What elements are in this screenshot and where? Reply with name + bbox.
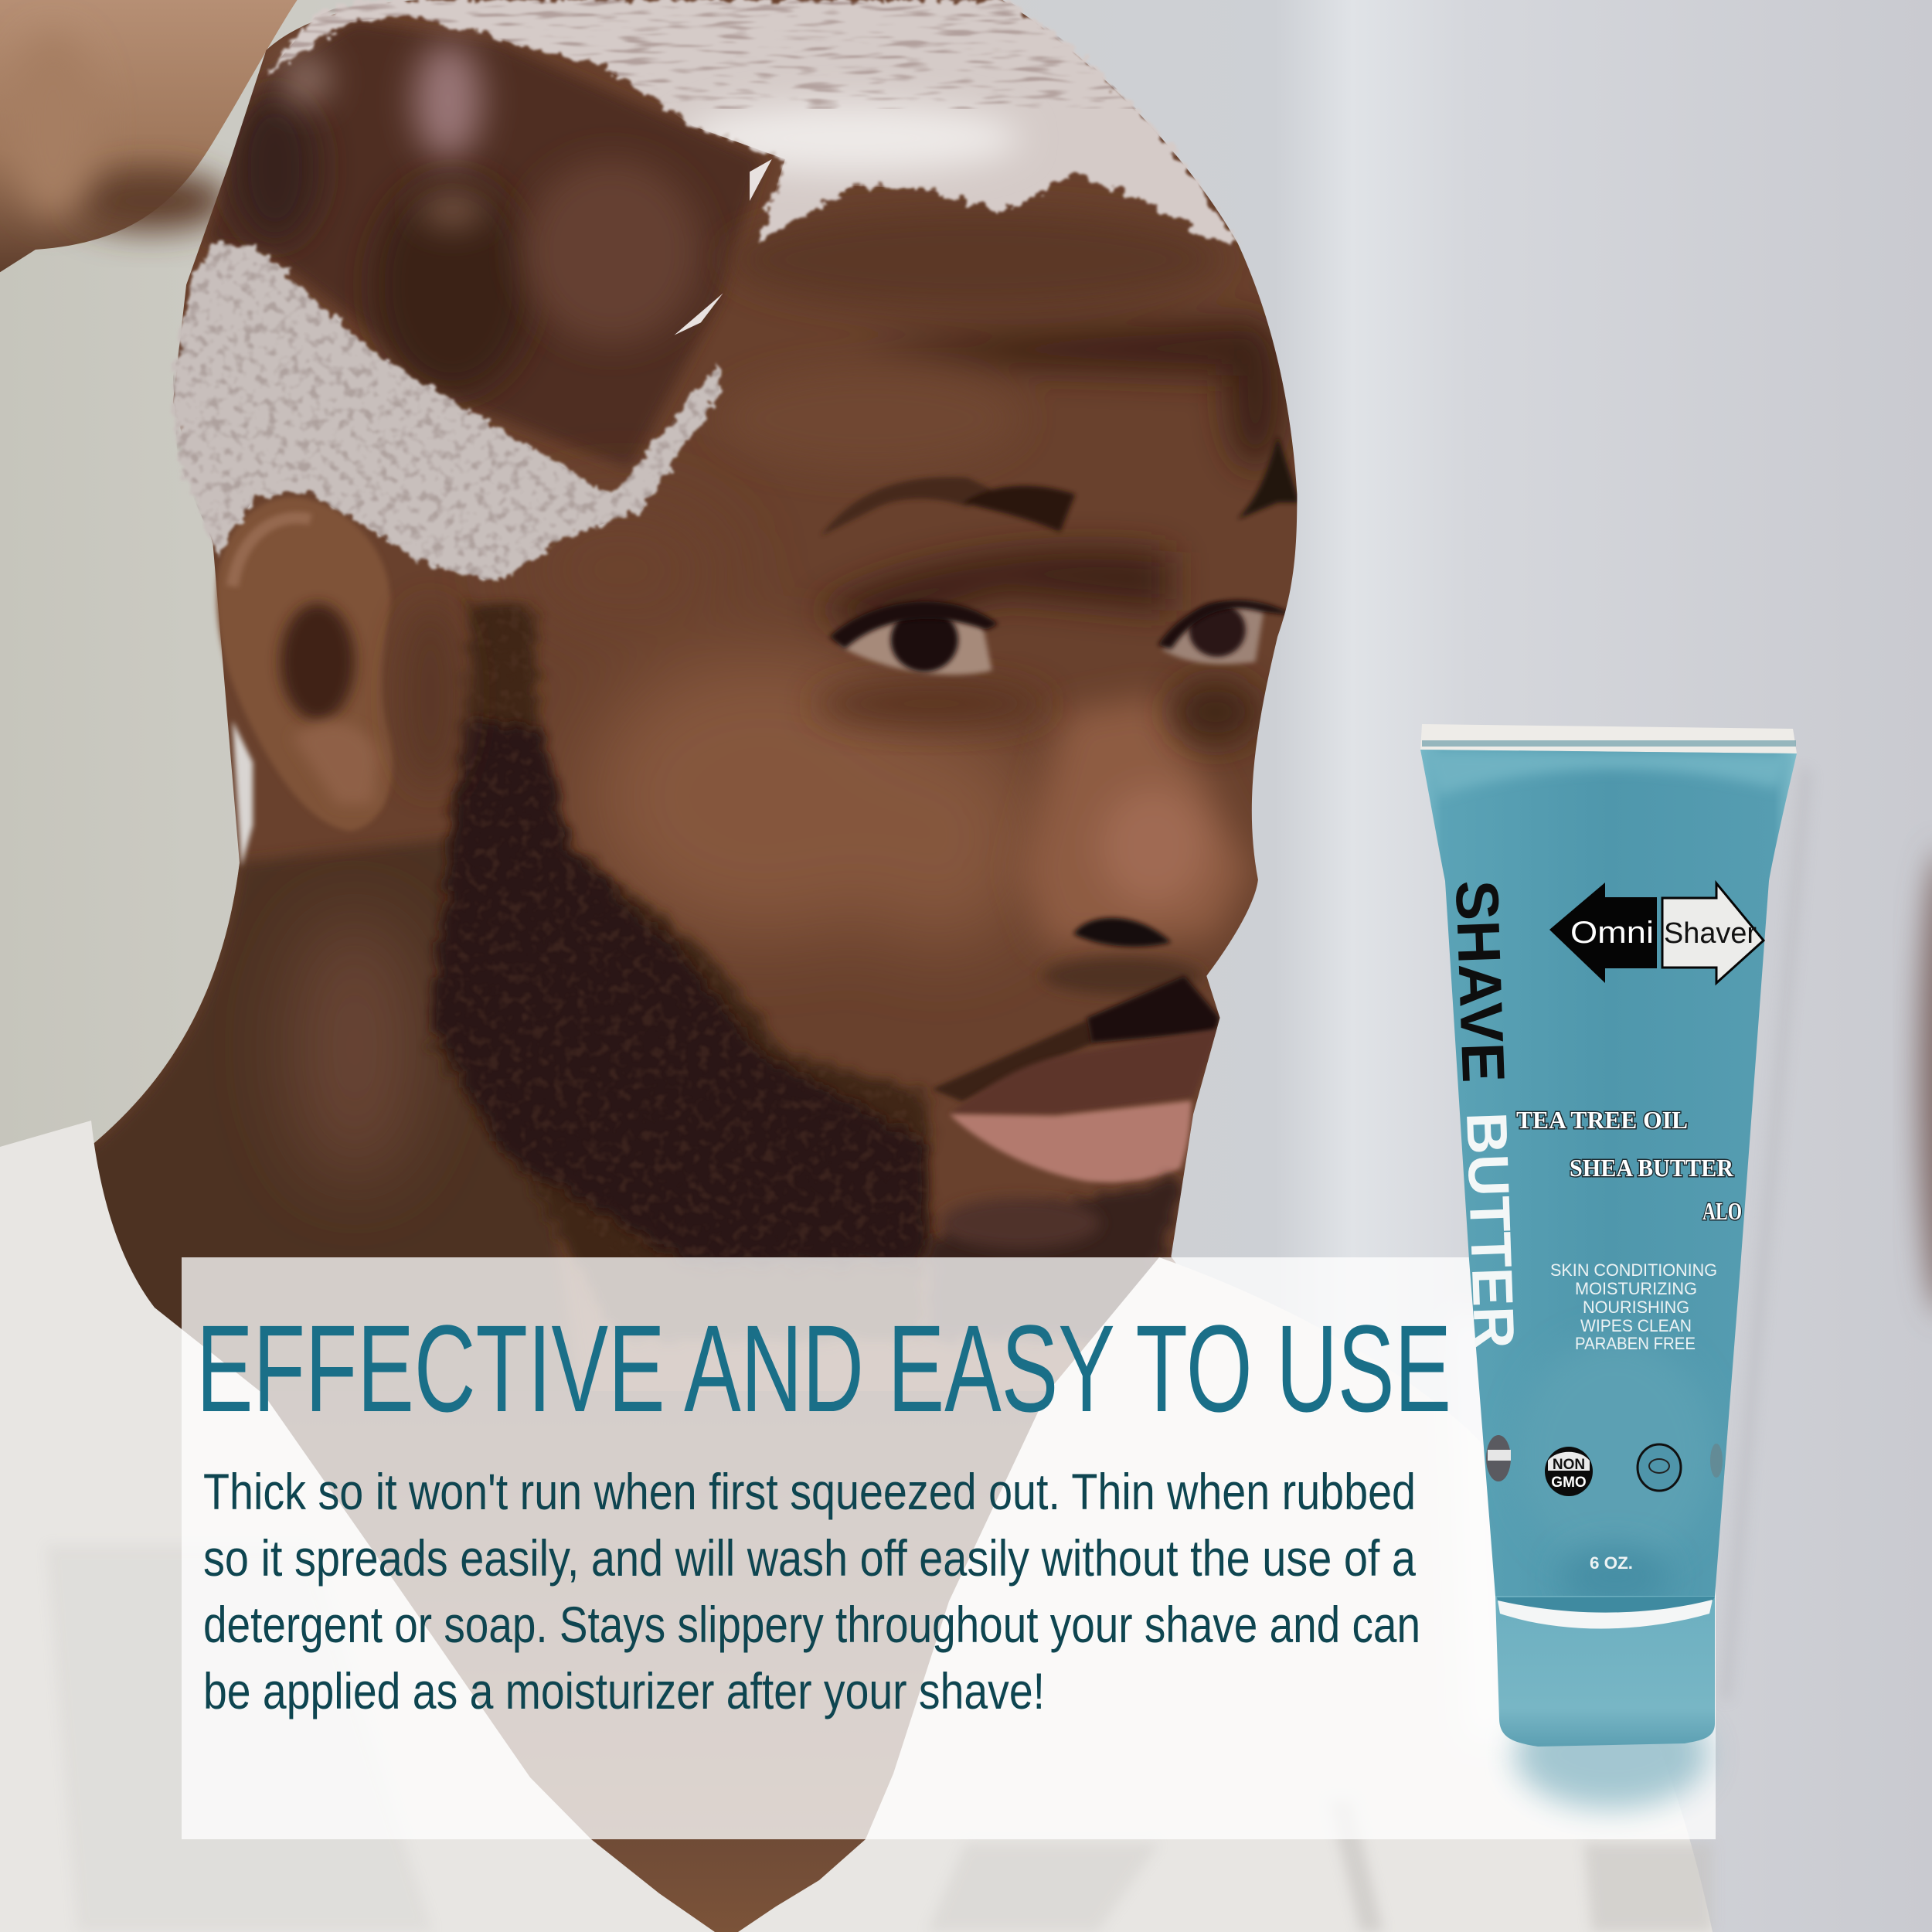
logo: black arrow [1549, 883, 1657, 983]
crimp teeth [1422, 740, 1796, 747]
right eye [1158, 600, 1295, 664]
benefit list: NOURISHING [1583, 1298, 1689, 1317]
band shadow line [1497, 1597, 1715, 1614]
body text: Thick so it won't run when first squeezed out. Thin when rubbed [203, 1463, 1416, 1520]
eyebrows [821, 436, 1300, 536]
chin beard [927, 1177, 1185, 1340]
benefit list [1550, 1260, 1717, 1353]
ear [216, 497, 462, 831]
cream wisps [674, 159, 772, 335]
bright cream, clipped [683, 105, 1020, 172]
ingredient: shea butter: SHEA BUTTER [1570, 1154, 1734, 1182]
arm raised to head [0, 0, 298, 272]
ingredient: tea tree oil: TEA TREE OIL [1516, 1106, 1688, 1134]
BUTTER lettering: BUTTER [1454, 1111, 1527, 1349]
beard mottle [417, 595, 949, 1265]
SHAVE lettering: SHAVE [1443, 879, 1518, 1083]
ingredient: aloe: ALO [1702, 1197, 1742, 1225]
benefit list: SKIN CONDITIONING [1550, 1260, 1717, 1280]
photo: white t-shirt [0, 1121, 1713, 1932]
under nose shadow [1043, 957, 1202, 995]
benefit list: MOISTURIZING [1575, 1279, 1697, 1298]
scalp highlights [283, 42, 484, 226]
photo: man's head, traced at 1.148 x 1.084 [0, 0, 1331, 1932]
tube shine [1420, 750, 1797, 1607]
badge: not tested on animals [1638, 1444, 1681, 1491]
body text [203, 1463, 1420, 1719]
body text: so it spreads easily, and will wash off easily without the use of a [203, 1529, 1416, 1587]
badge: non GMO [1545, 1447, 1593, 1496]
left eye [829, 601, 998, 675]
body text: detergent or soap. Stays slippery throughout your shave and can [203, 1596, 1420, 1653]
badge: recyclable [1710, 1444, 1723, 1478]
under-eye shadow [816, 680, 1047, 727]
tube glow [1515, 1700, 1708, 1808]
chin skin [940, 1198, 1100, 1248]
logo: Shaver: Shaver [1664, 917, 1757, 950]
nose [1020, 696, 1251, 947]
brow shadow [816, 548, 1171, 637]
moustache, thick right side [1087, 976, 1219, 1043]
crimp strip [1420, 724, 1797, 753]
chest skin below V-neck [232, 1391, 1051, 1932]
cheek [515, 502, 1038, 947]
white band [1498, 1600, 1713, 1629]
neck shading [94, 836, 564, 1329]
benefit list: WIPES CLEAN [1580, 1316, 1692, 1335]
upper lip [949, 1029, 1219, 1114]
nostril [1073, 918, 1171, 947]
shaving cream on top of head [266, 0, 1242, 245]
badge: made in USA [1486, 1435, 1511, 1481]
tube body [1420, 750, 1797, 1596]
logo: white arrow [1662, 883, 1764, 983]
tube cap [1495, 1596, 1715, 1747]
shirt fold shading [46, 1546, 1713, 1932]
moustache, sparse left side [931, 1020, 1093, 1101]
scalp centre shadow [372, 176, 532, 393]
lower lip [949, 1100, 1192, 1182]
size label: 6 OZ. [1590, 1553, 1633, 1573]
cream streak behind ear [233, 720, 253, 867]
scalp right lighter [523, 159, 701, 343]
product tube [1420, 724, 1812, 1808]
badge: non GMO: GMO [1551, 1475, 1587, 1491]
blurred object at right edge [1920, 850, 1932, 1314]
benefit list: PARABEN FREE [1575, 1334, 1696, 1353]
logo: Omni: Omni [1570, 916, 1654, 950]
cream streaks [266, 0, 1242, 109]
tube shadow [1719, 765, 1812, 1700]
cream shading in side patch [168, 235, 736, 595]
lighter neck [293, 913, 417, 1181]
body text: be applied as a moisturizer after your shave! [203, 1662, 1045, 1719]
forehead [719, 209, 1284, 469]
sideburn and beard [417, 595, 949, 1340]
dark scalp [204, 21, 763, 469]
tube left glow [1453, 1314, 1503, 1739]
translucent text panel [182, 1257, 1716, 1839]
scalp left shadow [230, 92, 319, 243]
head and neck skin [94, 0, 1297, 1391]
badge: non GMO: NON [1553, 1457, 1585, 1473]
shaving cream on side of head [168, 159, 772, 595]
